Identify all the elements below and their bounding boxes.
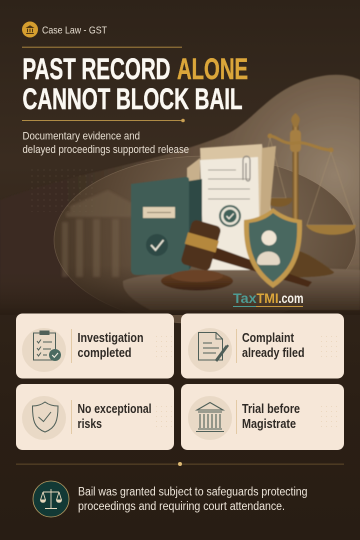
green folder [131, 177, 202, 275]
label: risks [78, 417, 102, 431]
subtitle: delayed proceedings supported release [22, 144, 189, 156]
label [78, 331, 144, 360]
logo: TaxTMI.com [233, 290, 304, 307]
label: Trial before [242, 402, 300, 416]
subtitle [22, 130, 189, 156]
icon: scales badge [33, 481, 69, 517]
icon circle [22, 396, 66, 440]
title: PAST RECORD [22, 53, 170, 86]
label: Complaint [242, 331, 295, 345]
text: Bail was granted subject to safeguards protecting [78, 486, 308, 498]
label [242, 402, 300, 431]
text [78, 486, 308, 513]
card: investigation completed [16, 314, 174, 378]
callout: bail conditions [33, 481, 308, 517]
title: CANNOT BLOCK BAIL [22, 83, 242, 116]
logo: TaxTMI.com: TMI [256, 290, 278, 306]
scales [258, 113, 356, 277]
label [78, 402, 152, 431]
badge: case law [22, 22, 107, 38]
label: case law: Case Law - GST [42, 24, 107, 36]
shield [244, 208, 302, 288]
label: No exceptional [78, 402, 152, 416]
card: no exceptional risks [16, 384, 174, 450]
logo: TaxTMI.com: .com [278, 290, 304, 306]
platform [123, 268, 360, 310]
subtitle: Documentary evidence and [22, 130, 140, 142]
card: complaint already filed [181, 314, 344, 378]
documents [187, 144, 278, 270]
label: Magistrate [242, 417, 296, 431]
icon: document and pen [198, 332, 227, 361]
icon circle [22, 328, 66, 372]
icon circle [188, 328, 232, 372]
icon: courthouse badge [22, 22, 38, 38]
illustration [62, 113, 360, 310]
icon: checklist [34, 331, 61, 361]
label: completed [78, 346, 132, 360]
icon circle [188, 396, 232, 440]
card: trial before magistrate [181, 384, 344, 450]
stamp [220, 206, 240, 226]
text: proceedings and requiring court attendance. [78, 501, 285, 513]
icon: shield check [32, 402, 58, 432]
title: ALONE [177, 53, 248, 86]
logo: TaxTMI.com: Tax [233, 290, 257, 306]
title [22, 53, 248, 116]
label: already filed [242, 346, 304, 360]
paperclip [243, 156, 250, 181]
icon: courthouse [196, 402, 224, 432]
gavel [161, 219, 312, 290]
label [242, 331, 304, 360]
courthouse silhouette [62, 190, 132, 277]
label: Investigation [78, 331, 144, 345]
